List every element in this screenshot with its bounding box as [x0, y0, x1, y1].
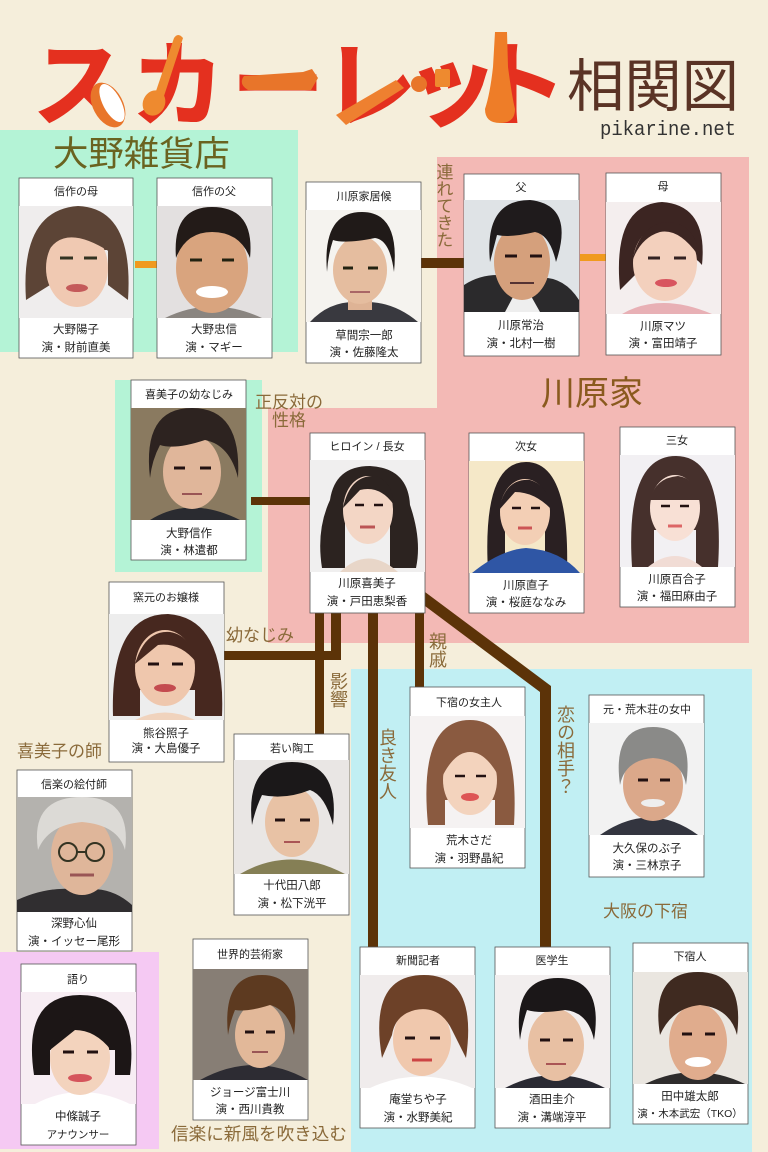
panel: 大阪の下宿	[351, 669, 752, 1152]
card: 庵堂ちや子	[360, 947, 475, 1128]
portrait	[306, 210, 421, 322]
card: 深野心仙: 深野心仙	[51, 916, 97, 930]
portrait	[589, 723, 704, 835]
card: 大野忠信	[157, 178, 272, 358]
card: 田中雄太郎: 田中雄太郎	[661, 1089, 719, 1103]
card: 大野陽子: 演・財前直美	[42, 340, 111, 354]
portrait	[469, 461, 584, 573]
portrait	[410, 716, 525, 828]
card: 川原常治: 父	[516, 182, 526, 194]
icon: plank	[242, 69, 318, 90]
card: 草間宗一郎: 草間宗一郎	[335, 329, 393, 342]
card: 十代田八郎: 十代田八郎	[263, 878, 321, 892]
label: 信楽に新風を吹き込む: 信楽に新風を吹き込む	[171, 1124, 347, 1144]
card: 田中雄太郎: 演・木本武宏（TKO）	[637, 1107, 743, 1120]
portrait	[633, 972, 748, 1084]
card: 大野陽子	[19, 178, 133, 358]
label: 連れてきた: 連れてきた	[434, 163, 453, 248]
panel: 川原家	[268, 157, 749, 643]
card: 川原百合子: 川原百合子	[648, 573, 706, 586]
label: 幼なじみ: 幼なじみ	[226, 626, 294, 645]
label: 良き友人: 良き友人	[377, 728, 397, 800]
card: 中條誠子: アナウンサー	[47, 1129, 109, 1141]
card: 酒田圭介: 酒田圭介	[529, 1093, 575, 1106]
card: 中條誠子: 中條誠子	[55, 1109, 101, 1123]
card: 川原百合子	[620, 427, 735, 607]
portrait	[21, 992, 136, 1104]
card: 川原マツ: 母	[658, 180, 668, 193]
card: 川原直子	[469, 433, 584, 613]
card: 草間宗一郎: 川原家居候	[336, 189, 392, 203]
card: 大野忠信: 信作の父	[192, 184, 236, 198]
card: 大野信作	[131, 380, 246, 560]
label: 正反対の性格: 正反対の	[255, 393, 323, 412]
card: 川原マツ	[606, 173, 721, 355]
card: 大野信作: 喜美子の幼なじみ	[145, 388, 233, 401]
portrait	[157, 206, 272, 318]
heading: 大野雑貨店: 大野雑貨店	[53, 134, 230, 174]
card: 庵堂ちや子: 演・水野美紀	[384, 1110, 453, 1124]
card: ジョージ富士川: ジョージ富士川	[210, 1086, 290, 1099]
icon: ladle	[139, 35, 183, 119]
panel: 語り	[0, 952, 159, 1149]
label: 親戚: 親戚	[427, 632, 447, 669]
card: 川原常治: 川原常治	[498, 318, 544, 332]
card: 酒田圭介: 演・溝端淳平	[518, 1110, 586, 1124]
card: 中條誠子: 語り	[67, 973, 89, 986]
card: 川原直子: 演・桜庭ななみ	[486, 595, 566, 609]
portrait	[310, 460, 425, 572]
portrait	[360, 975, 475, 1088]
card: 川原百合子: 三女	[666, 434, 688, 447]
card: 大久保のぶ子: 元・荒木荘の女中	[603, 703, 691, 716]
portrait	[464, 200, 579, 312]
card: 草間宗一郎	[306, 182, 421, 363]
card: 深野心仙: 信楽の絵付師	[41, 777, 107, 791]
icon: bottle	[485, 32, 515, 123]
portrait	[495, 975, 610, 1088]
card: 大久保のぶ子	[589, 695, 704, 877]
portrait	[109, 614, 224, 720]
card: 川原喜美子: ヒロイン / 長女	[329, 440, 405, 453]
site name: pikarine.net	[600, 119, 736, 142]
card: 大野陽子: 信作の母	[54, 184, 98, 198]
icon: bowl	[83, 77, 133, 133]
card: 大久保のぶ子: 演・三林京子	[612, 858, 682, 872]
card: 川原直子: 川原直子	[503, 578, 549, 592]
portrait	[17, 797, 132, 912]
card: 荒木さだ: 演・羽野晶紀	[434, 852, 504, 865]
card: 草間宗一郎: 演・佐藤隆太	[330, 345, 399, 359]
card: 十代田八郎	[234, 734, 349, 915]
label: 正反対の性格	[255, 393, 323, 430]
connector lines	[135, 254, 606, 948]
card: 酒田圭介	[495, 947, 610, 1128]
label: 正反対の性格: 性格	[272, 411, 306, 430]
portrait	[620, 455, 735, 567]
card: 中條誠子	[21, 964, 136, 1145]
card: 田中雄太郎	[633, 943, 748, 1124]
card: 川原喜美子	[310, 433, 425, 613]
card: 庵堂ちや子: 新聞記者	[396, 954, 440, 967]
card: 大久保のぶ子: 大久保のぶ子	[612, 841, 682, 855]
card: 川原常治	[464, 174, 579, 356]
label: 恋の相手？: 恋の相手？	[555, 705, 575, 795]
card: ジョージ富士川	[193, 939, 308, 1120]
heading: 相関図: 相関図	[567, 55, 739, 119]
card: 大野信作: 演・林遣都	[160, 543, 218, 557]
card: ジョージ富士川: 世界的芸術家	[217, 947, 283, 961]
card: 川原マツ: 演・富田靖子	[628, 337, 698, 350]
card: 熊谷照子: 演・大島優子	[132, 741, 200, 755]
icon: small pots	[411, 69, 450, 92]
card: 十代田八郎: 若い陶工	[270, 741, 314, 755]
label: 喜美子の師: 喜美子の師	[17, 742, 102, 761]
card: 大野忠信: 演・マギー	[185, 341, 243, 354]
portrait	[19, 206, 133, 318]
card: 熊谷照子	[109, 582, 224, 762]
portrait	[606, 202, 721, 314]
portrait	[131, 408, 246, 520]
card: 川原常治: 演・北村一樹	[486, 336, 556, 350]
card: 川原直子: 次女	[515, 440, 537, 453]
card: 荒木さだ	[410, 687, 525, 868]
title: スカーレット: スカーレット	[33, 36, 566, 138]
card: 熊谷照子: 熊谷照子	[143, 727, 189, 740]
portrait	[193, 969, 308, 1080]
card: 深野心仙	[17, 770, 132, 951]
label: 影響: 影響	[328, 672, 348, 708]
card: 荒木さだ: 荒木さだ	[446, 834, 492, 847]
card: 十代田八郎: 演・松下洸平	[258, 896, 326, 910]
card: 川原百合子: 演・福田麻由子	[637, 589, 717, 603]
heading: 川原家: 川原家	[541, 375, 643, 413]
card: 荒木さだ: 下宿の女主人	[436, 695, 502, 709]
portrait	[234, 760, 349, 874]
card: 川原喜美子: 川原喜美子	[338, 576, 396, 590]
card: 深野心仙: 演・イッセー尾形	[28, 935, 120, 948]
card: ジョージ富士川: 演・西川貴教	[216, 1102, 285, 1116]
card: 熊谷照子: 窯元のお嬢様	[133, 590, 199, 604]
icon: tile	[336, 80, 404, 125]
card: 大野陽子: 大野陽子	[53, 322, 99, 336]
label: 大阪の下宿: 大阪の下宿	[603, 902, 688, 921]
card: 川原喜美子: 演・戸田恵梨香	[327, 594, 408, 608]
card: 酒田圭介: 医学生	[536, 953, 568, 967]
panel: 大野雑貨店	[0, 130, 298, 572]
card: 川原マツ: 川原マツ	[640, 320, 686, 333]
card: 庵堂ちや子: 庵堂ちや子	[389, 1092, 447, 1106]
card: 大野忠信: 大野忠信	[191, 322, 237, 336]
card: 田中雄太郎: 下宿人	[674, 949, 706, 963]
card: 大野信作: 大野信作	[166, 526, 212, 540]
